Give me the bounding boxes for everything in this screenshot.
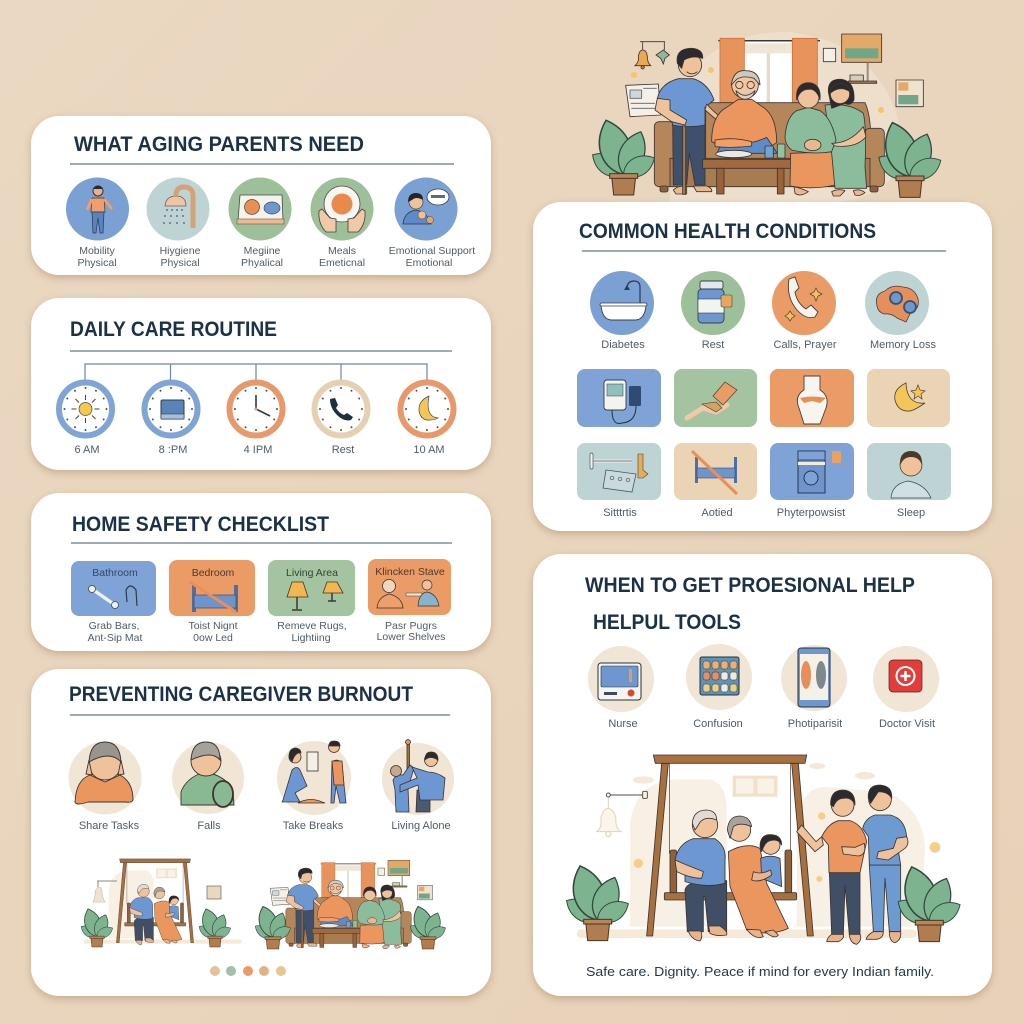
captions: Falls xyxy=(197,820,221,832)
sofa scene xyxy=(626,34,923,196)
captions: Emotional xyxy=(406,257,452,269)
panel: preventing caregiver burnout xyxy=(31,669,491,996)
captions: Meals xyxy=(328,245,356,257)
pagination dots xyxy=(210,966,286,976)
captions: Diabetes xyxy=(601,339,645,351)
captions: Emotional Support xyxy=(389,245,475,257)
tile: bathroom: Bathroom xyxy=(92,567,138,579)
heading: DAILY CARE ROUTINE xyxy=(70,318,277,341)
man in blue xyxy=(863,785,908,943)
plants xyxy=(561,861,964,942)
plant right xyxy=(874,118,945,197)
clock: moon xyxy=(400,382,454,436)
icon: bed xyxy=(228,178,292,240)
card xyxy=(31,493,491,651)
tile: moon xyxy=(867,369,950,427)
captions: Nurse xyxy=(608,718,638,730)
captions: Take Breaks xyxy=(283,820,344,832)
tile: bathroom xyxy=(71,561,156,616)
captions: Mobility xyxy=(79,245,116,257)
tile: bedroom: Bedroom xyxy=(192,567,235,579)
tile: crossed out bed xyxy=(674,443,757,500)
sparkles xyxy=(631,67,884,113)
panel: when to get professional help xyxy=(533,554,992,996)
captions: Physical xyxy=(77,257,117,269)
clock: phone xyxy=(314,382,368,436)
panel: home safety checklist xyxy=(31,493,491,651)
mini illustration: sofa family xyxy=(252,860,448,949)
bell and ornament xyxy=(635,42,669,69)
heading: HOME SAFETY CHECKLIST xyxy=(72,513,329,536)
captions: Grab Bars, xyxy=(89,620,139,632)
clock labels xyxy=(74,444,445,456)
captions: Toist Nignt xyxy=(188,620,238,632)
captions: Emeticnal xyxy=(319,257,365,269)
heading: WHEN TO GET PROESIONAL HELP xyxy=(585,574,915,597)
tile: washing machine xyxy=(770,443,854,500)
icon: phone and stars xyxy=(772,271,836,335)
icon: bathtub xyxy=(590,271,654,335)
man in orange xyxy=(797,790,867,944)
tile: blood pressure monitor xyxy=(577,369,661,427)
bell xyxy=(596,791,647,837)
captions: Lower Shelves xyxy=(377,631,445,643)
captions: Remeve Rugs, xyxy=(277,620,347,632)
captions: Hiygiene xyxy=(160,245,201,257)
heading: WHAT AGING PARENTS NEED xyxy=(74,133,364,156)
captions: Share Tasks xyxy=(79,820,140,832)
captions xyxy=(603,507,925,519)
clock labels: Rest xyxy=(332,444,354,456)
clock: sun xyxy=(59,382,112,436)
panel: daily care routine xyxy=(31,298,491,470)
icon: emotional support xyxy=(394,178,458,240)
captions: Calls, Prayer xyxy=(774,339,837,351)
icon: helpers at work xyxy=(277,741,351,815)
captions xyxy=(608,718,935,730)
tile: living area xyxy=(268,560,355,616)
card xyxy=(31,116,491,275)
icon: assisted walking xyxy=(382,740,454,815)
captions: Confusion xyxy=(693,718,743,730)
clock labels: 6 AM xyxy=(74,444,100,456)
captions xyxy=(77,245,475,269)
clock labels: 4 IPM xyxy=(244,444,272,456)
tile: bedroom xyxy=(169,560,255,616)
captions: Ant-Sip Mat xyxy=(88,632,143,644)
captions xyxy=(79,820,451,832)
swing family illustration xyxy=(561,755,964,944)
tile: grab bar and pills xyxy=(577,443,661,500)
card xyxy=(31,669,491,996)
clock: device xyxy=(144,382,198,436)
heading: PREVENTING CAREGIVER BURNOUT xyxy=(69,683,413,706)
icon: smiling elder xyxy=(172,742,244,814)
icon: pill organiser xyxy=(686,644,752,710)
subheading: HELPUL TOOLS xyxy=(593,611,741,634)
clouds and flowers xyxy=(633,763,940,882)
tile: doctor portrait xyxy=(867,443,951,500)
tagline: Safe care. Dignity. Peace if mind for every Indian family. xyxy=(586,964,934,979)
icon: mobility xyxy=(66,178,129,240)
panel: common health conditions xyxy=(533,202,992,531)
tile: recliner xyxy=(674,369,757,427)
captions: Rest xyxy=(702,339,724,351)
captions: Megiine xyxy=(244,245,281,257)
captions: Photiparisit xyxy=(788,718,842,730)
captions xyxy=(601,339,937,351)
captions: Doctor Visit xyxy=(879,718,935,730)
captions: Phyterpowsist xyxy=(777,507,845,519)
captions: Lightiing xyxy=(291,632,331,644)
icon: meals xyxy=(310,178,374,240)
captions xyxy=(88,620,445,644)
icon: first aid kit xyxy=(873,646,939,712)
icon: stressed caregiver xyxy=(68,742,142,814)
clock: four o'clock xyxy=(230,382,282,436)
captions: Aotied xyxy=(701,507,733,519)
tile: living area: Living Area xyxy=(286,567,338,579)
heading: COMMON HEALTH CONDITIONS xyxy=(579,220,876,243)
plant left xyxy=(587,116,659,195)
captions: 0ow Led xyxy=(193,632,233,644)
captions: Living Alone xyxy=(391,820,451,832)
mini illustration: swing family xyxy=(78,859,241,947)
clock labels: 8 :PM xyxy=(159,444,187,456)
captions: Sitttrtis xyxy=(603,507,637,519)
tile: kitchen stove xyxy=(368,559,451,615)
tile: kitchen stove: Klincken Stave xyxy=(375,566,445,578)
icon: monitor xyxy=(588,646,654,712)
clock labels: 10 AM xyxy=(413,444,445,456)
icon: phone telehealth xyxy=(781,645,847,711)
card xyxy=(533,554,992,996)
hero illustration: family on sofa xyxy=(587,32,945,205)
captions: Sleep xyxy=(897,507,925,519)
icon: hygiene xyxy=(146,178,210,240)
card xyxy=(31,298,491,470)
card xyxy=(533,202,992,531)
captions: Phyalical xyxy=(241,257,283,269)
captions: Pasr Pugrs xyxy=(385,620,437,632)
captions: Memory Loss xyxy=(870,339,937,351)
tile: knee joint xyxy=(770,369,854,427)
icon: medicine bottle xyxy=(681,271,745,335)
panel: what aging parents need xyxy=(31,116,491,275)
captions: Physical xyxy=(160,257,200,269)
icon: brain gears xyxy=(865,271,929,335)
